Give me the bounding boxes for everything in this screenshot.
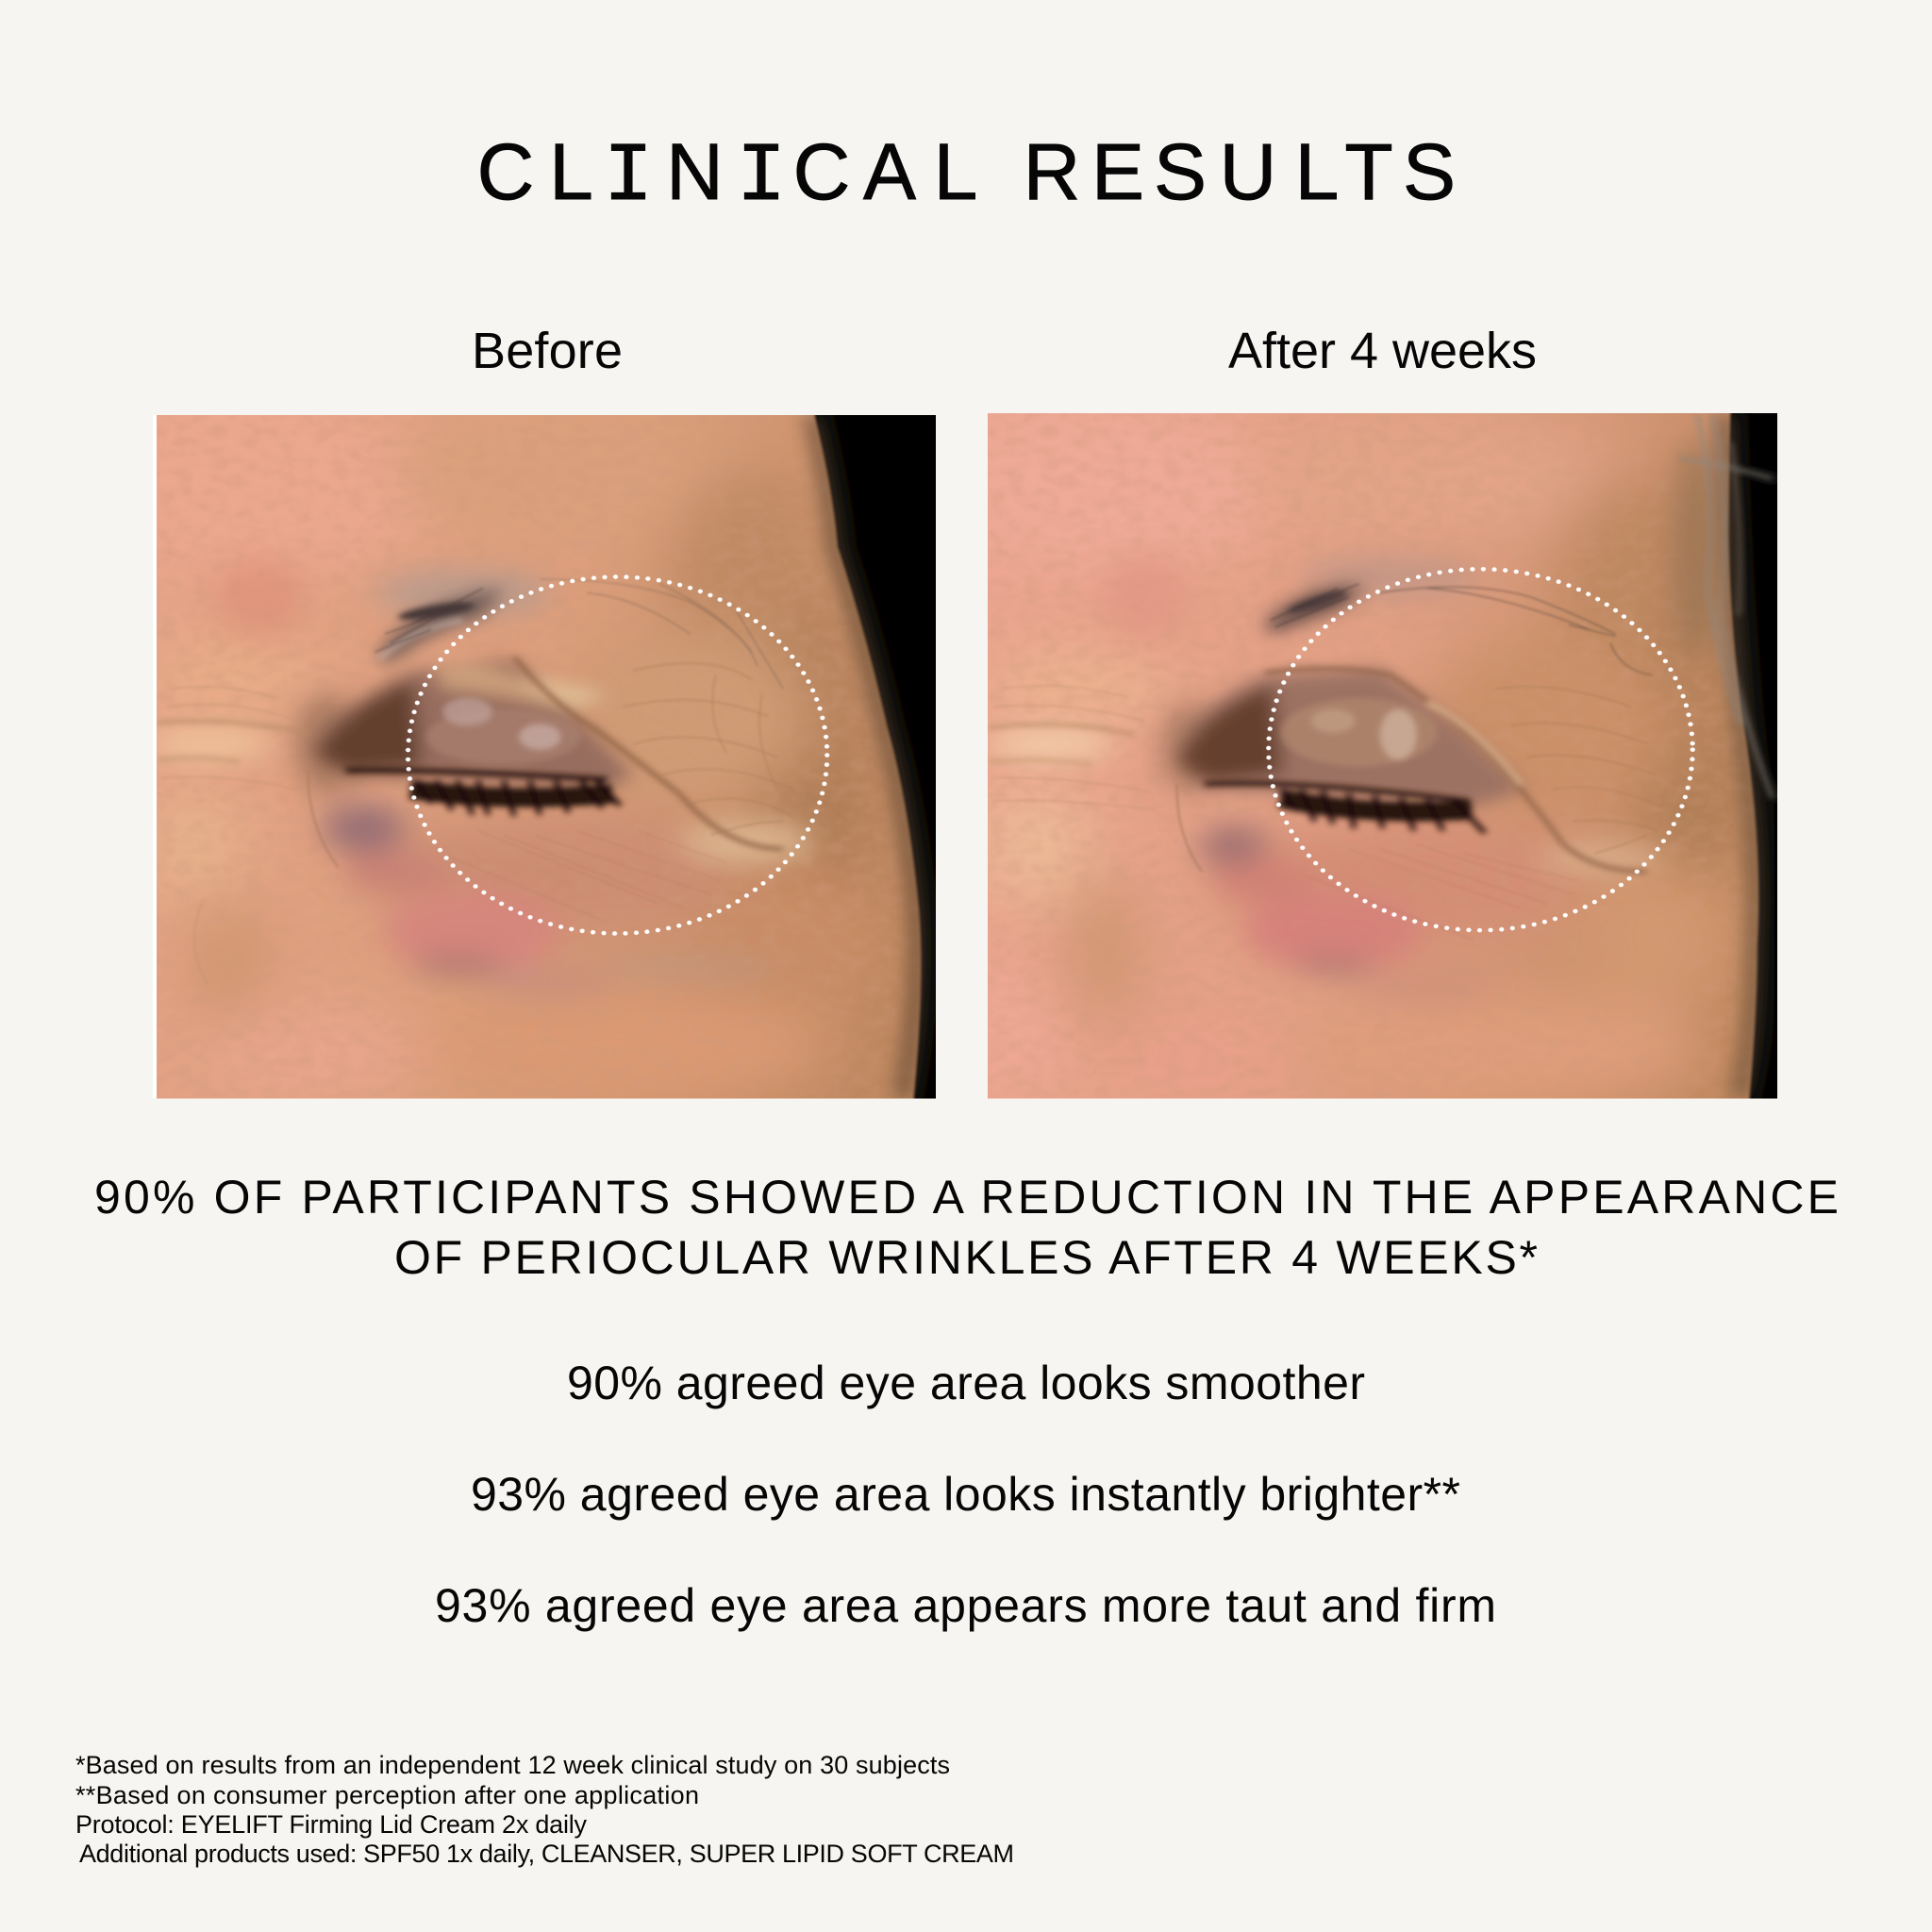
photo: after 4 weeks — [988, 413, 1777, 1098]
label: before: Before — [472, 323, 623, 379]
photo: before — [153, 415, 936, 1098]
headline statement — [94, 1171, 1839, 1284]
footnotes: **Based on consumer perception after one application — [75, 1781, 699, 1809]
dotted circle — [1269, 569, 1692, 930]
footnotes: Protocol: EYELIFT Firming Lid Cream 2x daily — [75, 1810, 587, 1839]
label: after 4 weeks: After 4 weeks — [1228, 323, 1537, 379]
stat: brighter: 93% agreed eye area looks instantly brighter** — [471, 1468, 1460, 1521]
headline statement: OF PERIOCULAR WRINKLES AFTER 4 WEEKS* — [394, 1231, 1538, 1284]
footnotes — [75, 1751, 1014, 1868]
dotted circle — [408, 576, 827, 934]
footnotes: Additional products used: SPF50 1x daily, CLEANSER, SUPER LIPID SOFT CREAM — [79, 1840, 1014, 1868]
headline statement: 90% OF PARTICIPANTS SHOWED A REDUCTION IN THE APPEARANCE — [94, 1171, 1839, 1224]
footnotes: *Based on results from an independent 12 week clinical study on 30 subjects — [75, 1751, 950, 1779]
stat: smoother: 90% agreed eye area looks smoother — [567, 1357, 1365, 1409]
title: CLINICAL RESULTS — [477, 127, 1456, 225]
stat: firmer: 93% agreed eye area appears more taut and firm — [435, 1579, 1496, 1632]
